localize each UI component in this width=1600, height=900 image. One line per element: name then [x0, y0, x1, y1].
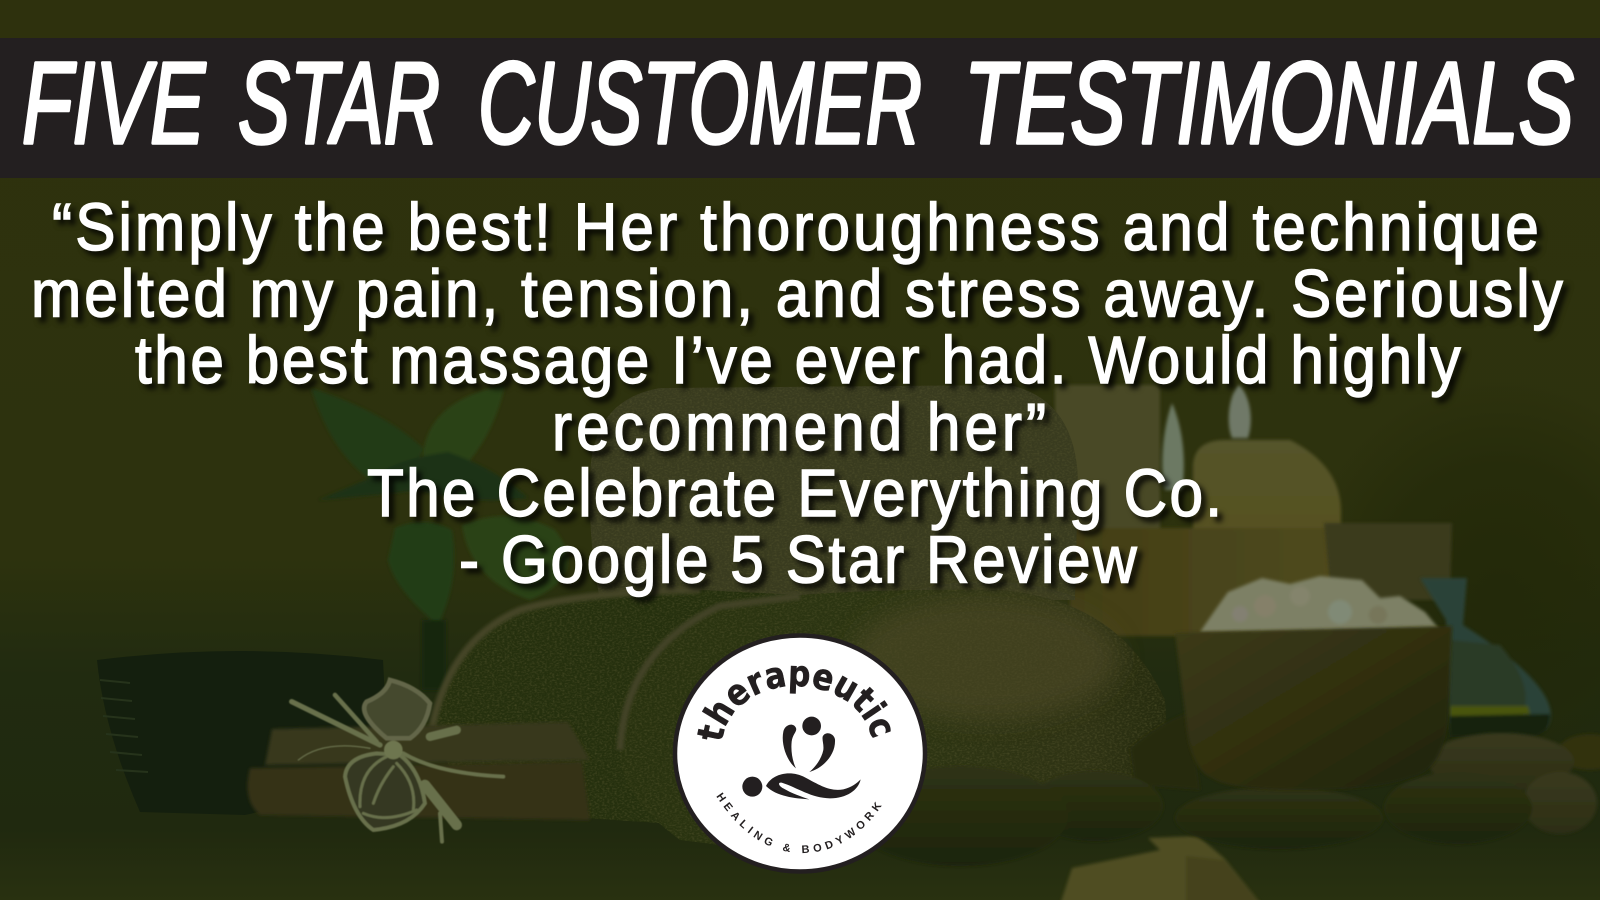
raffia bow — [292, 680, 503, 842]
salt pile — [1200, 576, 1440, 632]
testimonial quote and attribution: The Celebrate Everything Co. — [367, 455, 1222, 531]
testimonial quote and attribution: “Simply the best! Her thoroughness and technique — [52, 189, 1539, 265]
corked bottle — [1324, 523, 1551, 737]
testimonial quote and attribution: - Google 5 Star Review — [459, 522, 1138, 597]
river stones — [852, 712, 1600, 866]
left towel roll — [432, 590, 800, 830]
title text: FIVE — [22, 38, 206, 168]
title text — [22, 38, 1574, 168]
right towel roll — [620, 590, 1170, 860]
back candles — [1055, 385, 1341, 636]
logo tagline: HEALING & BODYWORK — [716, 792, 882, 854]
upper towel — [590, 385, 1078, 600]
testimonial quote and attribution — [31, 189, 1563, 597]
title band — [0, 38, 1600, 178]
title text: CUSTOMER — [478, 38, 922, 168]
leaves — [311, 385, 568, 690]
brass bowl — [1175, 626, 1452, 790]
cinnamon sticks tied with raffia — [248, 680, 590, 842]
testimonial quote and attribution: recommend her” — [552, 389, 1046, 465]
dark ceramic bowl left — [97, 651, 386, 815]
testimonial quote and attribution: the best massage I’ve ever had. Would highly — [135, 322, 1461, 398]
title text: STAR — [238, 38, 440, 168]
logo wordmark: therapeutic — [697, 666, 891, 740]
logo badge — [672, 633, 928, 874]
table floor highlight — [1060, 836, 1262, 900]
testimonial quote and attribution: melted my pain, tension, and stress away. Seriously — [31, 256, 1563, 331]
logo icon: massage figures — [742, 717, 861, 799]
darker right wall — [1300, 380, 1600, 800]
